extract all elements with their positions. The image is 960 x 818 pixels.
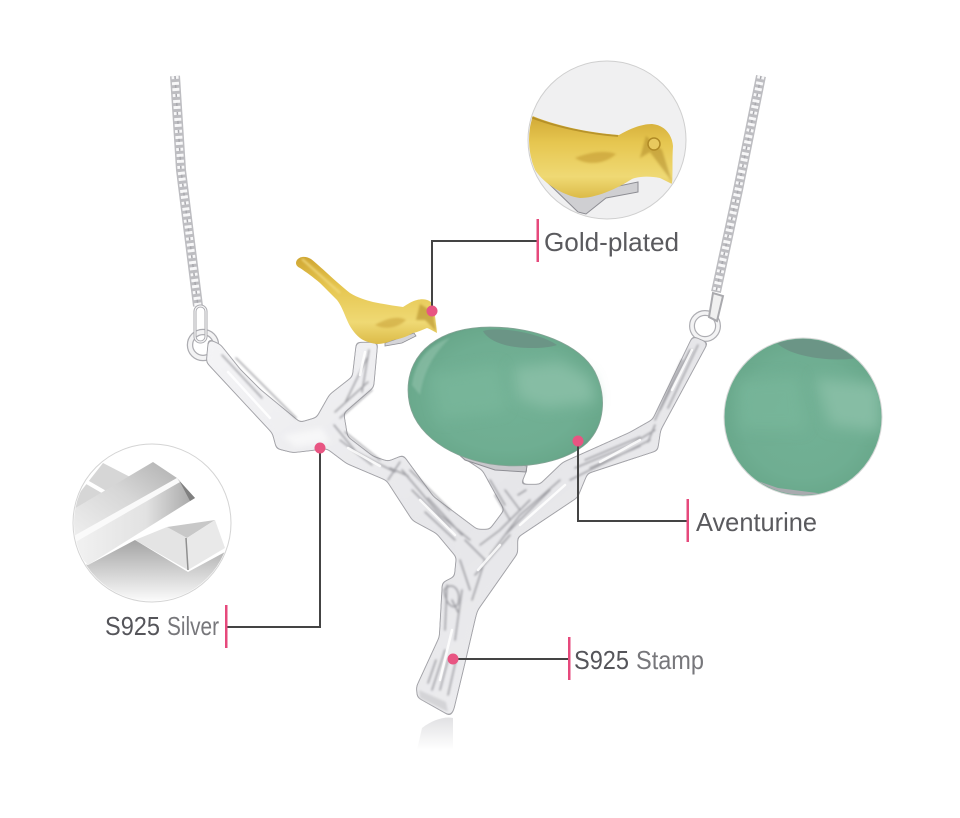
trunk reflection [417,717,453,750]
right chain [716,76,761,292]
bar shadow [86,540,224,598]
drill hole [483,329,557,348]
detail circle: silver bars [70,444,232,604]
gemstone nest base [453,449,527,472]
branch bark texture [222,345,698,695]
callout: S925 silver: S925 [105,611,160,641]
detail circle: aventurine [724,336,882,503]
rear bar white strip [85,481,104,492]
silver branch [207,337,707,715]
infographic canvas [72,60,882,741]
callout: S925 silver [105,442,326,648]
front silver bar [72,462,195,565]
gold bird [296,257,437,344]
callout: gold-plated [426,219,679,316]
silver base under bird [545,180,638,214]
zoomed bird body [525,113,673,198]
branch under bird feet [385,333,416,346]
left chain [175,76,198,306]
callout: aventurine [572,436,817,542]
callout: S925 stamp: Stamp [636,645,704,675]
necklace illustration [175,76,761,750]
callout: aventurine: Aventurine [696,507,817,537]
right clasp rings [692,293,723,339]
detail circle: gold-plated bird [525,61,686,219]
gem drill hole [778,339,854,360]
silver base sliver [758,481,820,495]
branch white highlights [228,350,692,680]
callout: gold-plated: Gold-plated [544,227,679,257]
callout: S925 stamp: S925 [574,645,629,675]
aventurine gemstone [408,327,603,466]
rear silver bar upper part [76,463,129,508]
callout: S925 silver: Silver [167,611,219,641]
left clasp rings [190,306,216,358]
rear silver bar lower part [135,520,225,570]
callout: S925 stamp [448,637,704,680]
